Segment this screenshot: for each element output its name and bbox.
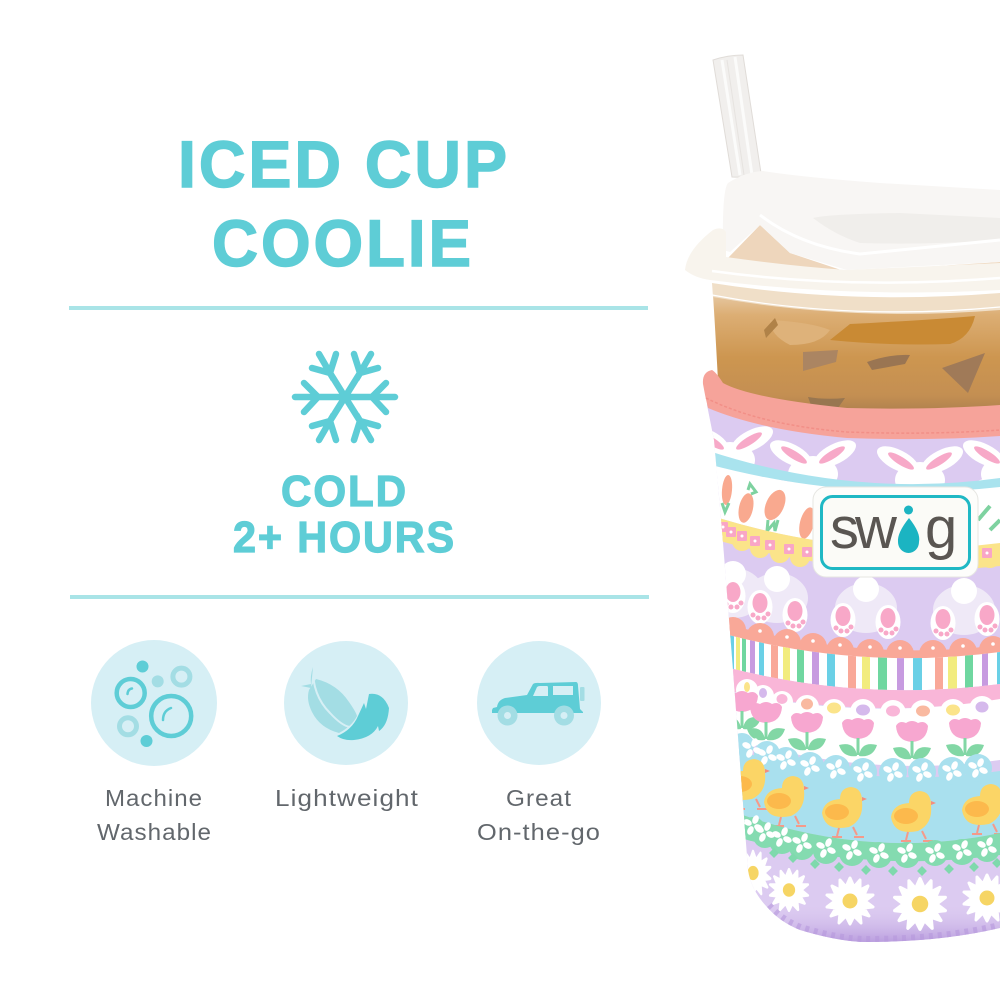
title: Iced Cup Coolie: [178, 127, 510, 280]
feature: lightweight: [275, 641, 419, 811]
feature: great on the go: [477, 641, 601, 845]
pink band: [733, 668, 1000, 708]
heading: Cold 2+ Hours: COLD: [281, 467, 408, 516]
straw: [713, 55, 761, 177]
label: Machine Washable: Washable: [97, 819, 212, 845]
label: Great On-the-go: Great: [506, 785, 572, 811]
coral scalloped trim: [728, 617, 1000, 658]
daisy band: [746, 850, 1000, 942]
icon: jeep: [492, 682, 584, 726]
feature: machine washable: [91, 640, 217, 845]
icon: snowflake: [295, 354, 395, 440]
label: Great On-the-go: [477, 785, 601, 845]
label: Machine Washable: [97, 785, 212, 845]
product photo: iced cup with coolie: [683, 55, 1000, 950]
title: Iced Cup Coolie: ICED CUP: [178, 127, 510, 201]
label: Machine Washable: Machine: [105, 785, 203, 811]
logo wordmark: swig: [830, 496, 957, 561]
swig logo patch: [813, 487, 978, 577]
coffee in cup: [713, 295, 1000, 420]
icon: feather: [301, 667, 389, 740]
bunny heads: [712, 426, 1000, 488]
coolie sleeve: [707, 404, 1000, 942]
title: Iced Cup Coolie: COOLIE: [212, 206, 474, 280]
heading: Cold 2+ Hours: [233, 467, 456, 562]
green trim: [744, 815, 1000, 868]
blue chick band: [738, 733, 1000, 843]
yellow flower trim: [721, 518, 1000, 568]
heading: Cold 2+ Hours: 2+ HOURS: [233, 513, 456, 562]
icon: bubbles: [117, 660, 191, 747]
rainbow stripes: [730, 635, 1000, 690]
coral rim: [703, 370, 1000, 439]
bunny tails and feet: [702, 561, 1000, 640]
label: Lightweight: Lightweight: [275, 785, 419, 811]
tulip band: [734, 679, 1000, 766]
lid: [685, 171, 1000, 314]
label: Great On-the-go: On-the-go: [477, 819, 601, 845]
white carrot band: [715, 453, 1000, 546]
